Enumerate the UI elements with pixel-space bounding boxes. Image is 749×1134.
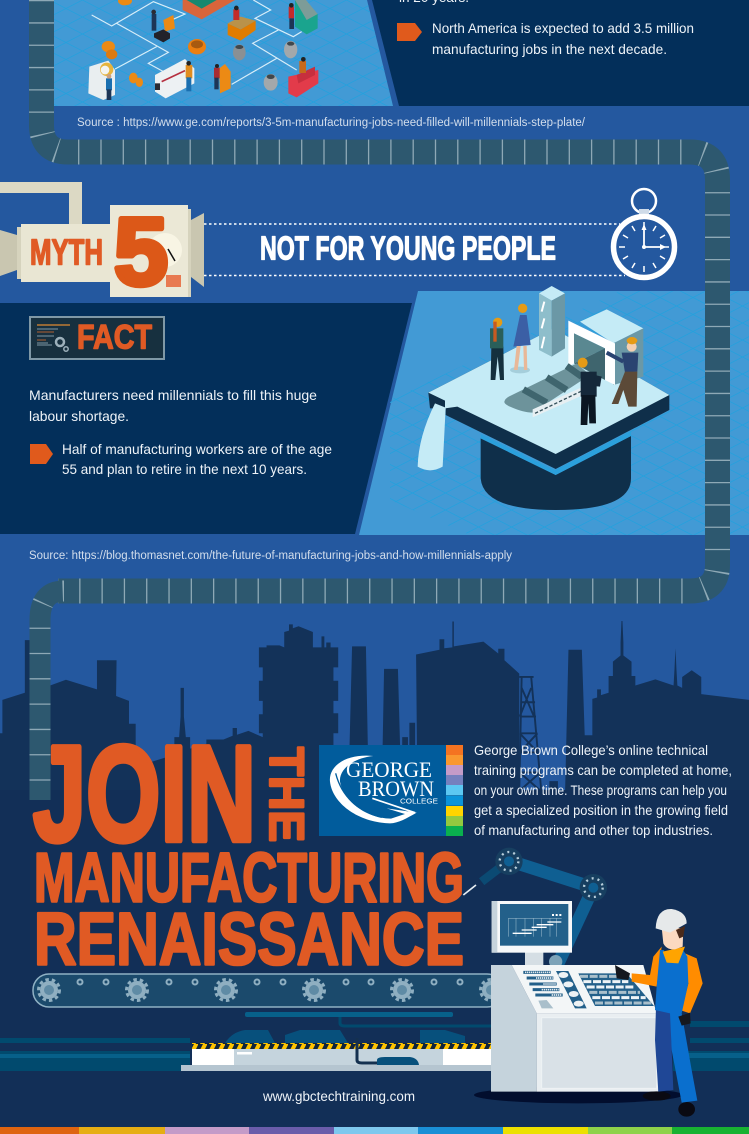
logo: george brown college: BROWN — [358, 776, 434, 801]
text: college description: training programs can be completed at home, — [474, 762, 732, 778]
panel: top illustration background — [54, 0, 393, 106]
myth 5 badge: MYTH — [30, 232, 103, 272]
text: college description: get a specialized position in the growing field — [474, 802, 728, 818]
text: top fact: North America is expected to add 3.5 million — [432, 20, 694, 36]
text: fact body: labour shortage. — [29, 408, 129, 424]
panel: graduation cap background — [359, 291, 749, 535]
heading: join the manufacturing renaissance: MANUFACTURING — [34, 838, 464, 916]
skyline silhouette — [0, 621, 749, 810]
text: college description: George Brown College’s online technical — [474, 742, 708, 758]
text: college description: of manufacturing and other top industries. — [474, 822, 713, 838]
lower machine — [181, 1030, 491, 1071]
heading: join the manufacturing renaissance: RENAISSANCE — [34, 898, 464, 980]
illustration: graduation cap factory — [418, 286, 669, 510]
worker at console — [615, 909, 703, 1117]
text: fact body — [29, 387, 332, 477]
colour bar — [0, 1127, 749, 1134]
panel: bottom dark background — [0, 790, 749, 1134]
heading: join the manufacturing renaissance — [33, 718, 464, 980]
logo: george brown college — [319, 745, 463, 836]
logo: george brown college: GEORGE — [346, 757, 432, 782]
control console — [474, 901, 683, 1103]
conveyor belt track — [40, 0, 718, 800]
heading: join the manufacturing renaissance: JOIN — [33, 718, 256, 870]
factory floor illustration — [88, 0, 318, 100]
fact badge — [30, 317, 164, 359]
source 2: Source: https://blog.thomasnet.com/the-future-of-manufacturing-jobs-and-how-millennials-apply — [29, 550, 512, 562]
background pipes — [0, 1012, 749, 1071]
panel: top fact dark panel — [372, 0, 749, 106]
icon: stopwatch — [614, 189, 674, 278]
text: top fact: manufacturing jobs in the next decade. — [432, 41, 667, 57]
fact badge: FACT — [77, 318, 152, 356]
panel: dark fact panel — [0, 303, 412, 534]
text: top fact — [397, 0, 694, 57]
logo: george brown college: COLLEGE — [400, 796, 438, 806]
source 1: Source : https://www.ge.com/reports/3-5m-manufacturing-jobs-need-filled-will-millennials-step-plate/ — [77, 117, 586, 129]
myth 5 badge: 5 — [114, 198, 168, 306]
robot arm — [463, 848, 607, 968]
myth 5 badge — [0, 182, 204, 306]
dotted rules — [204, 224, 625, 276]
conveyor with gears — [33, 974, 503, 1007]
text: fact body: Manufacturers need millennials to fill this huge — [29, 387, 317, 403]
text: college description — [474, 742, 732, 838]
text: fact body: 55 and plan to retire in the next 10 years. — [62, 461, 307, 477]
text: fact body: Half of manufacturing workers are of the age — [62, 441, 332, 457]
heading: join the manufacturing renaissance: THE — [259, 747, 312, 842]
heading: not for young people: NOT FOR YOUNG PEOPLE — [260, 230, 556, 268]
website url: www.gbctechtraining.com — [262, 1089, 415, 1104]
